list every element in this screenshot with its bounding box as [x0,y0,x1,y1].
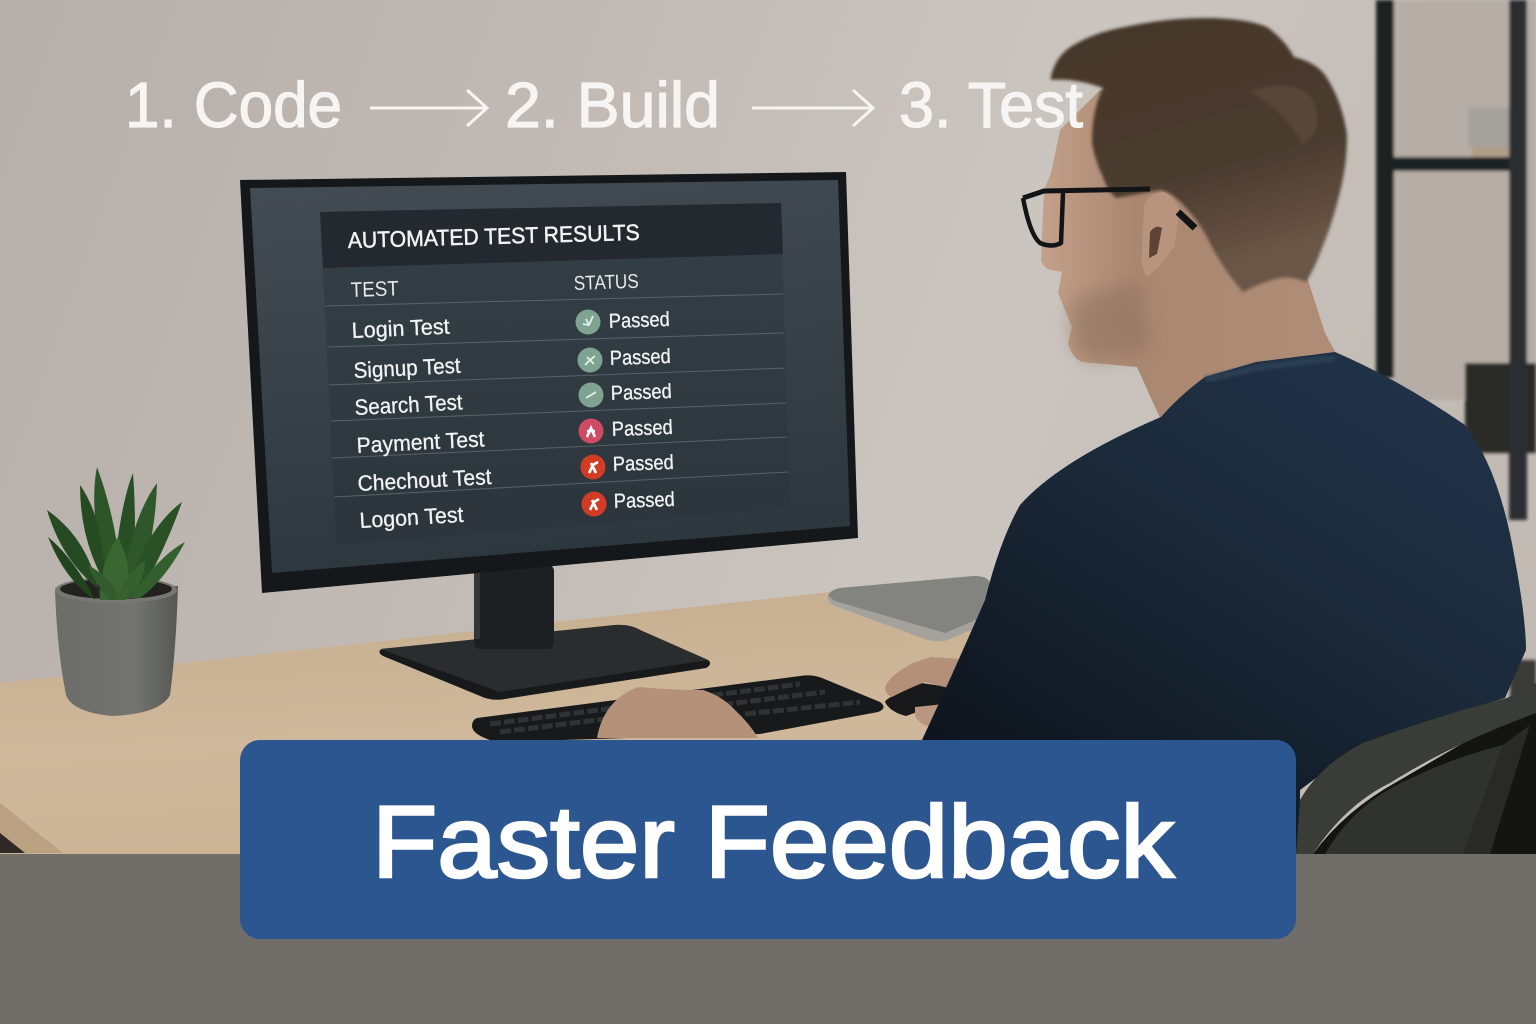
status labels: Passed [609,345,671,370]
test names: Login Test [351,314,450,343]
bottom band [0,854,1536,1024]
keyboard [472,675,884,742]
chair [1296,683,1536,854]
row dividers [325,294,788,497]
mouse and hand [885,657,975,727]
results panel [320,203,790,545]
monitor stand [379,565,710,700]
arrow 2 to 3 [752,90,873,126]
test names: Logon Test [359,502,464,533]
monitor screen [250,180,850,573]
shelf unit [1376,0,1536,700]
column header: test: TEST [350,277,399,302]
desk corner [0,803,63,853]
test names: Chechout Test [357,464,492,496]
icon: plant pot [55,577,178,716]
process flow [125,69,1083,141]
status labels [608,308,675,513]
monitor [240,172,858,593]
test names [351,314,492,533]
icon: plant leaves [47,467,185,600]
step 3 label: 3. Test [899,69,1083,141]
banner: faster feedback [240,740,1296,939]
panel header [320,203,783,268]
plant [47,467,185,716]
sweater collar [1205,358,1335,380]
laptop on desk [828,576,990,641]
person [922,18,1526,854]
icon: glasses [1023,189,1195,246]
hair [1051,18,1347,292]
test names: Payment Test [356,426,485,458]
sweater [922,352,1526,854]
banner text: Faster Feedback [372,785,1175,899]
status labels: Passed [612,451,674,476]
status icons [576,310,606,516]
step 1 label: 1. Code [125,69,342,141]
step 2 label: 2. Build [505,69,720,141]
heading: automated test results: AUTOMATED TEST RESULTS [347,220,640,253]
test names: Signup Test [353,353,461,383]
status labels: Passed [610,380,672,405]
arrow 1 to 2 [370,90,487,126]
hand on keyboard [597,687,758,738]
neck and face [1041,90,1345,420]
test names: Search Test [354,389,463,420]
ear [1142,192,1179,277]
status labels: Passed [608,308,670,333]
monitor bezel [240,172,858,593]
desk [0,590,1000,854]
status labels: Passed [613,488,675,513]
column header: status: STATUS [573,271,639,295]
stubble shading [1072,280,1150,362]
status labels: Passed [611,416,673,441]
